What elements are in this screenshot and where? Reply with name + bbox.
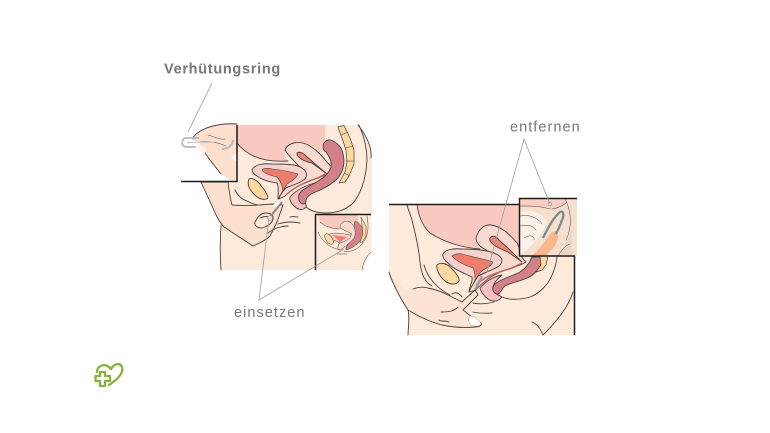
- hand holding ring: [193, 124, 237, 180]
- hand and arm: [389, 272, 481, 327]
- label: Verhütungsring: Verhütungsring: [164, 62, 281, 78]
- pointer line: Verhütungsring: [188, 83, 212, 132]
- bladder area: [417, 204, 520, 250]
- bladder area outline: [237, 143, 288, 161]
- curled fingers: [255, 213, 273, 228]
- pointer lines: einsetzen: [259, 218, 344, 300]
- body skin: [389, 204, 574, 335]
- rectum: [299, 140, 344, 204]
- inset frame: ring in place: [389, 198, 577, 335]
- finger knuckle: [260, 216, 270, 218]
- ring in fingers: [182, 138, 233, 149]
- inset frame: ring inserted: [316, 214, 371, 270]
- spine: [338, 126, 354, 183]
- panel: removing the ring: [389, 198, 577, 335]
- rectum: [493, 257, 543, 294]
- ring being removed: [474, 276, 482, 292]
- hand outline: [389, 272, 481, 327]
- upper organ: [279, 143, 335, 199]
- body contour lines: [407, 204, 573, 335]
- finger creases: [200, 135, 226, 146]
- thigh lines: [473, 302, 494, 313]
- label: entfernen: entfernen: [510, 120, 581, 136]
- logo: heart with cross: [96, 364, 122, 386]
- lower-left organ: [443, 249, 502, 291]
- inset: ring inserted: [316, 215, 371, 270]
- white patch at wrist: [231, 154, 237, 162]
- hand outline: [193, 124, 237, 174]
- fingernail: [468, 316, 481, 326]
- body skin: [203, 125, 372, 270]
- body contour lines: [220, 125, 371, 270]
- small red cavity: [297, 152, 327, 174]
- ring being inserted: [270, 202, 282, 217]
- uterine cavity: [262, 168, 298, 191]
- uterine cavity: [452, 254, 493, 281]
- curled finger: [439, 293, 462, 322]
- lower-left organ: [252, 164, 306, 199]
- small red cavity: [490, 236, 522, 262]
- thigh lines: [268, 217, 300, 233]
- upper organ: [469, 225, 526, 292]
- pointer lines: entfernen: [487, 139, 550, 272]
- spine: [536, 256, 548, 272]
- arm: [201, 182, 283, 246]
- red vaginal stripe: [286, 174, 325, 195]
- pubic bone: [248, 178, 268, 199]
- pubic bone: [437, 263, 459, 284]
- fingernail: [273, 203, 281, 207]
- ring highlight: [268, 216, 272, 220]
- red vaginal stripe: [476, 263, 522, 285]
- label: einsetzen: einsetzen: [234, 305, 306, 321]
- inset frame: hand: [181, 125, 237, 182]
- panel: inserting the ring: [181, 124, 372, 270]
- lower pink lobe: [480, 275, 502, 301]
- thumb: [196, 146, 206, 153]
- bladder area: [237, 125, 325, 161]
- lower pink lobe: [290, 182, 318, 210]
- inset: ring in place: [520, 199, 577, 256]
